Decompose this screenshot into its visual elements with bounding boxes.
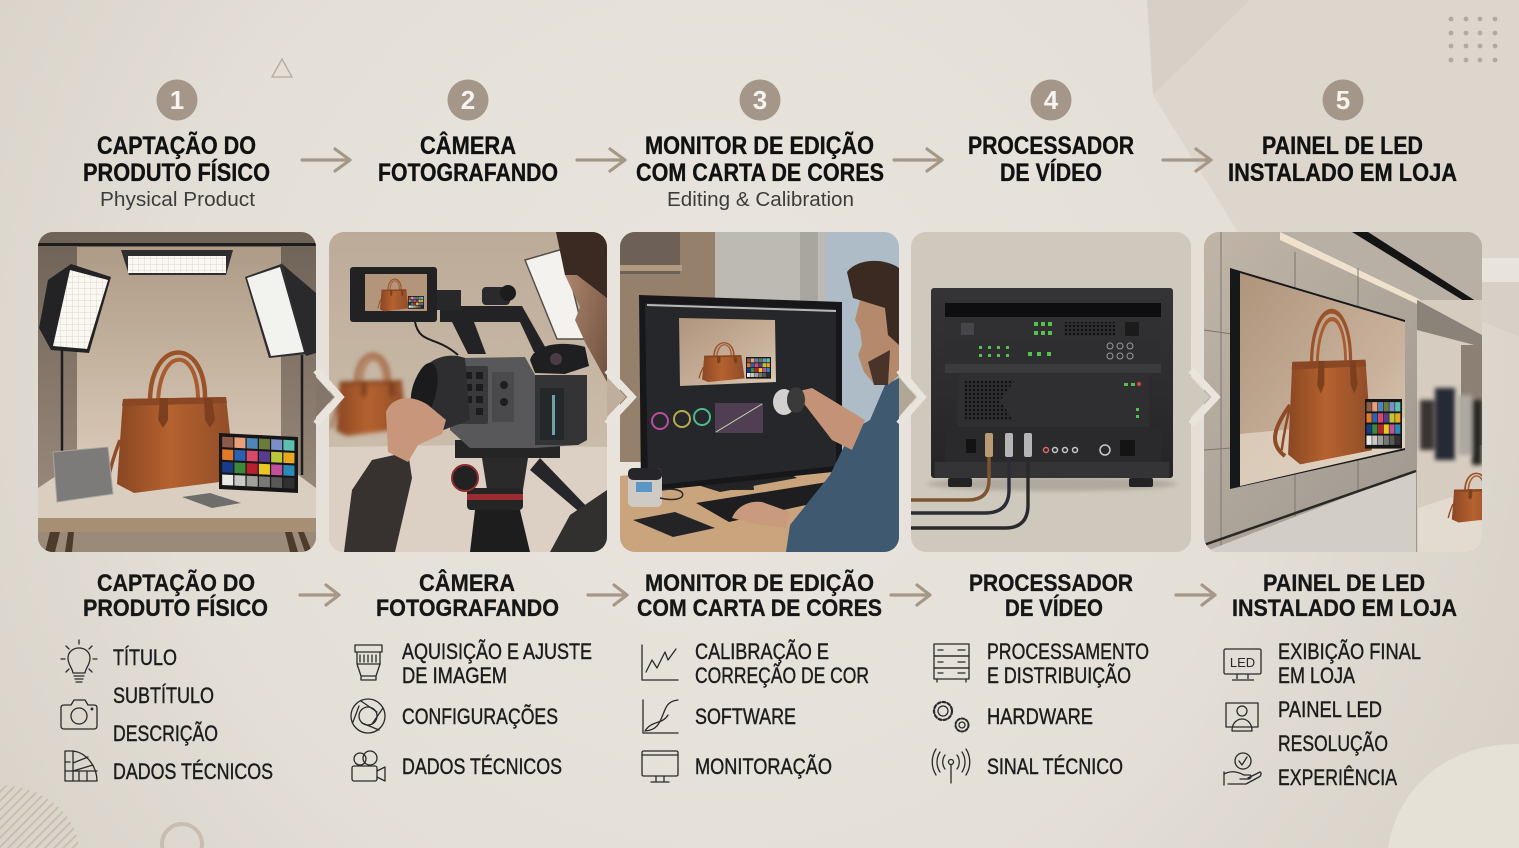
text: experiência: EXPERIÊNCIA (1278, 765, 1397, 790)
person head (556, 232, 607, 382)
wall joints (1204, 232, 1358, 552)
number badge 5 (1322, 80, 1364, 120)
header: step 3 (636, 80, 884, 211)
header: step 2 (378, 80, 558, 187)
header: step 4 (968, 80, 1134, 187)
icon: profile panel (1226, 703, 1258, 731)
light: left softbox (39, 264, 111, 353)
icon: gears (934, 702, 968, 732)
lower title 3: COM CARTA DE CORES (637, 595, 882, 622)
number badge 1: 1 (170, 85, 184, 115)
chevron connector 4 (1191, 370, 1216, 424)
text: subtítulo: SUBTÍTULO (113, 683, 214, 708)
number badge 2 (448, 80, 488, 120)
bag (108, 352, 235, 493)
step 2 title: CÂMERA (420, 130, 516, 160)
step 4 title: DE VÍDEO (1000, 158, 1102, 187)
icon: aperture (351, 699, 385, 733)
panel: editing monitor (620, 232, 899, 552)
text: sinal técnico: SINAL TÉCNICO (987, 754, 1123, 779)
text: aquisição: DE IMAGEM (402, 663, 507, 688)
list column 5 (1224, 639, 1421, 790)
header: step 1 (83, 80, 270, 211)
softbox in background (525, 249, 585, 339)
icon: wireless signal (932, 749, 970, 783)
light: right softbox (245, 263, 316, 358)
panel: video processor (911, 232, 1191, 552)
text: painel led: PAINEL LED (1278, 697, 1382, 722)
text: processamento: E DISTRIBUIÇÃO (987, 663, 1131, 688)
step 4 title: PROCESSADOR (968, 132, 1134, 160)
text: monitoração: MONITORAÇÃO (695, 754, 832, 779)
arrow 4 to 5 (1163, 149, 1211, 171)
icon: server (934, 644, 969, 682)
tablet (633, 512, 715, 537)
step 3 subtitle: Editing & Calibration (667, 189, 854, 211)
text: aquisição: AQUISIÇÃO E AJUSTE (402, 639, 592, 664)
cables (911, 455, 1028, 528)
decorative triangle (272, 59, 292, 77)
number badge 4 (1030, 80, 1072, 120)
camera body (405, 285, 589, 448)
icon: line chart (642, 645, 678, 680)
list column 1 (61, 640, 273, 784)
icon: lens (355, 645, 382, 680)
light: top panel (121, 250, 233, 275)
person: shirt (786, 378, 899, 552)
step 1 subtitle: Physical Product (100, 189, 255, 211)
keyboard (696, 482, 824, 522)
number badge 3: 3 (753, 85, 767, 115)
colour chart (219, 433, 298, 493)
icon: curve graph (643, 700, 678, 733)
lower arrow 1 (300, 585, 339, 605)
number badge 3 (740, 80, 780, 120)
stands (62, 350, 302, 475)
lower title 4: DE VÍDEO (1005, 594, 1103, 622)
lower arrow 2 (588, 585, 627, 605)
rack (931, 288, 1173, 487)
step 1 title: CAPTAÇÃO DO (97, 130, 256, 160)
person: head (855, 295, 899, 385)
number badge 5: 5 (1336, 85, 1350, 115)
puck in hand (773, 387, 805, 415)
number badge 2: 2 (461, 85, 475, 115)
icon: camera (61, 700, 97, 729)
list column 3 (642, 639, 869, 782)
small bag on pedestal (1418, 473, 1499, 552)
panel: studio product capture (38, 232, 316, 552)
blurred bag (331, 354, 407, 436)
chevron connector 1 (316, 370, 340, 424)
chevron connector 3 (899, 370, 922, 424)
icon: hand with check (1224, 753, 1261, 785)
ceiling (1368, 232, 1482, 300)
floor (1204, 470, 1416, 552)
lower title 1: PRODUTO FÍSICO (83, 594, 268, 622)
text: exibição: EXIBIÇÃO FINAL (1278, 639, 1421, 664)
text: software: SOFTWARE (695, 704, 796, 729)
lower title 4: PROCESSADOR (969, 570, 1133, 597)
decorative ring (162, 824, 202, 848)
step 3 title: COM CARTA DE CORES (636, 159, 884, 187)
arm and hand (344, 452, 412, 552)
person: forearm (795, 388, 865, 450)
small grey card (182, 493, 241, 508)
icon: LED display: LED (1230, 655, 1255, 670)
step 2 title: FOTOGRAFANDO (378, 159, 558, 187)
icon: monitor (642, 751, 678, 782)
list column 2 (351, 639, 592, 781)
lower title 1: CAPTAÇÃO DO (97, 569, 255, 597)
text: configurações: CONFIGURAÇÕES (402, 704, 558, 729)
text: dados técnicos: DADOS TÉCNICOS (113, 759, 273, 784)
text: hardware: HARDWARE (987, 704, 1093, 729)
table (38, 462, 316, 522)
lower arrow 3 (891, 585, 930, 605)
icon: video camera (352, 751, 385, 781)
shoulder (550, 490, 607, 552)
header: step 5 (1228, 80, 1457, 187)
lower arrow 4 (1176, 585, 1215, 605)
text: calibração: CALIBRAÇÃO E (695, 639, 829, 664)
LED screen (1230, 268, 1405, 489)
text: dados técnicos: DADOS TÉCNICOS (402, 754, 562, 779)
connectors (985, 433, 1032, 457)
status LEDs (979, 322, 1139, 418)
hand over lens (386, 398, 446, 462)
lower title 5: INSTALADO EM LOJA (1232, 595, 1457, 622)
list column 4 (932, 639, 1149, 783)
text: calibração: CORREÇÃO DE COR (695, 663, 869, 688)
step 1 title: PRODUTO FÍSICO (83, 158, 270, 187)
colorimeter (628, 468, 683, 507)
number badge 1 (156, 80, 198, 120)
lower title 2: FOTOGRAFANDO (376, 595, 559, 622)
arrow 3 to 4 (894, 149, 942, 171)
lower title 3: MONITOR DE EDIÇÃO (645, 569, 874, 597)
arrow 1 to 2 (302, 149, 350, 171)
chevron connector 2 (607, 370, 632, 424)
text: resolução: RESOLUÇÃO (1278, 731, 1388, 756)
icon: lightbulb (61, 640, 97, 682)
person: hand on keyboard (732, 502, 790, 528)
lower title 5: PAINEL DE LED (1263, 570, 1425, 597)
step 5 title: INSTALADO EM LOJA (1228, 159, 1457, 187)
number badge 4: 4 (1044, 85, 1059, 115)
step 3 title: MONITOR DE EDIÇÃO (645, 130, 874, 160)
panel: camera filming (329, 232, 607, 552)
text: processamento: PROCESSAMENTO (987, 639, 1149, 664)
monitor (639, 295, 842, 492)
grey card (53, 447, 113, 502)
tripod (452, 440, 590, 552)
text: exibição: EM LOJA (1278, 663, 1355, 688)
decorative dot grid (1449, 17, 1497, 62)
panel: LED in store (1204, 232, 1499, 552)
lower title 2: CÂMERA (419, 569, 515, 597)
icon: colour fan (65, 751, 97, 781)
text: descrição: DESCRIÇÃO (113, 721, 218, 746)
step 5 title: PAINEL DE LED (1262, 132, 1423, 160)
on-camera monitor (350, 267, 461, 355)
desk (620, 472, 899, 552)
icon: LED display (1224, 649, 1261, 680)
text: título: TÍTULO (113, 645, 177, 670)
arrow 2 to 3 (577, 149, 625, 171)
store opening (1417, 300, 1482, 552)
